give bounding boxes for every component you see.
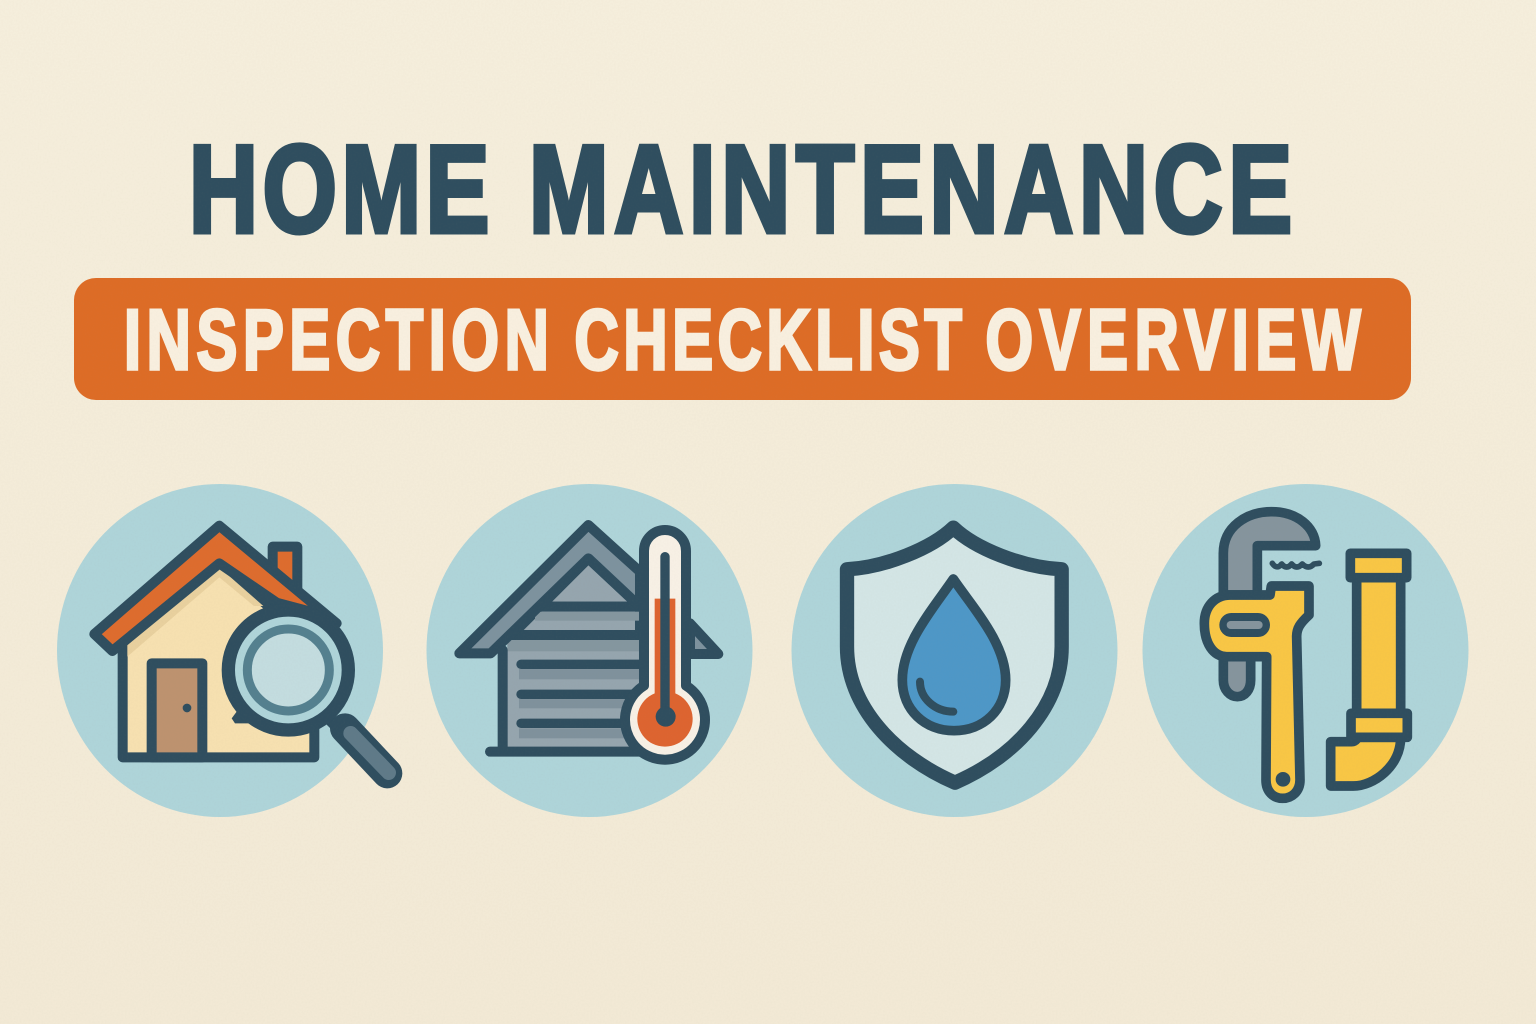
wrench body xyxy=(1204,586,1309,798)
subtitle text: INSPECTION xyxy=(124,292,549,387)
title: HOME xyxy=(189,121,489,259)
chimney xyxy=(273,547,297,592)
subtitle text: CHECKLIST xyxy=(574,292,962,387)
thermometer xyxy=(625,530,705,760)
shield xyxy=(847,528,1062,783)
roof xyxy=(459,525,640,653)
wrench teeth xyxy=(1272,563,1319,567)
garage wall xyxy=(507,639,641,748)
wrench upper jaw xyxy=(1223,512,1316,595)
magnifying glass handle xyxy=(330,720,347,737)
roof xyxy=(94,526,337,651)
pipe xyxy=(1357,578,1401,713)
magnifying glass lens xyxy=(228,610,348,730)
subtitle text: OVERVIEW xyxy=(986,292,1361,387)
icon: house with magnifying glass xyxy=(57,484,389,817)
wrench slot xyxy=(1231,589,1258,661)
subtitle text xyxy=(124,292,1361,387)
title xyxy=(189,121,1292,259)
door xyxy=(152,663,202,757)
title: MAINTENANCE xyxy=(529,121,1292,259)
icon: garage with thermometer xyxy=(426,484,752,817)
subtitle banner xyxy=(74,278,1411,400)
garage frame and slats xyxy=(490,650,647,752)
icon: shield with water drop xyxy=(792,484,1118,817)
upper gable panels xyxy=(540,558,640,607)
wrench lower stem xyxy=(1223,655,1251,697)
house body xyxy=(123,563,314,757)
water drop xyxy=(902,579,1006,731)
icon: pipe wrench and pipe xyxy=(1142,484,1468,817)
